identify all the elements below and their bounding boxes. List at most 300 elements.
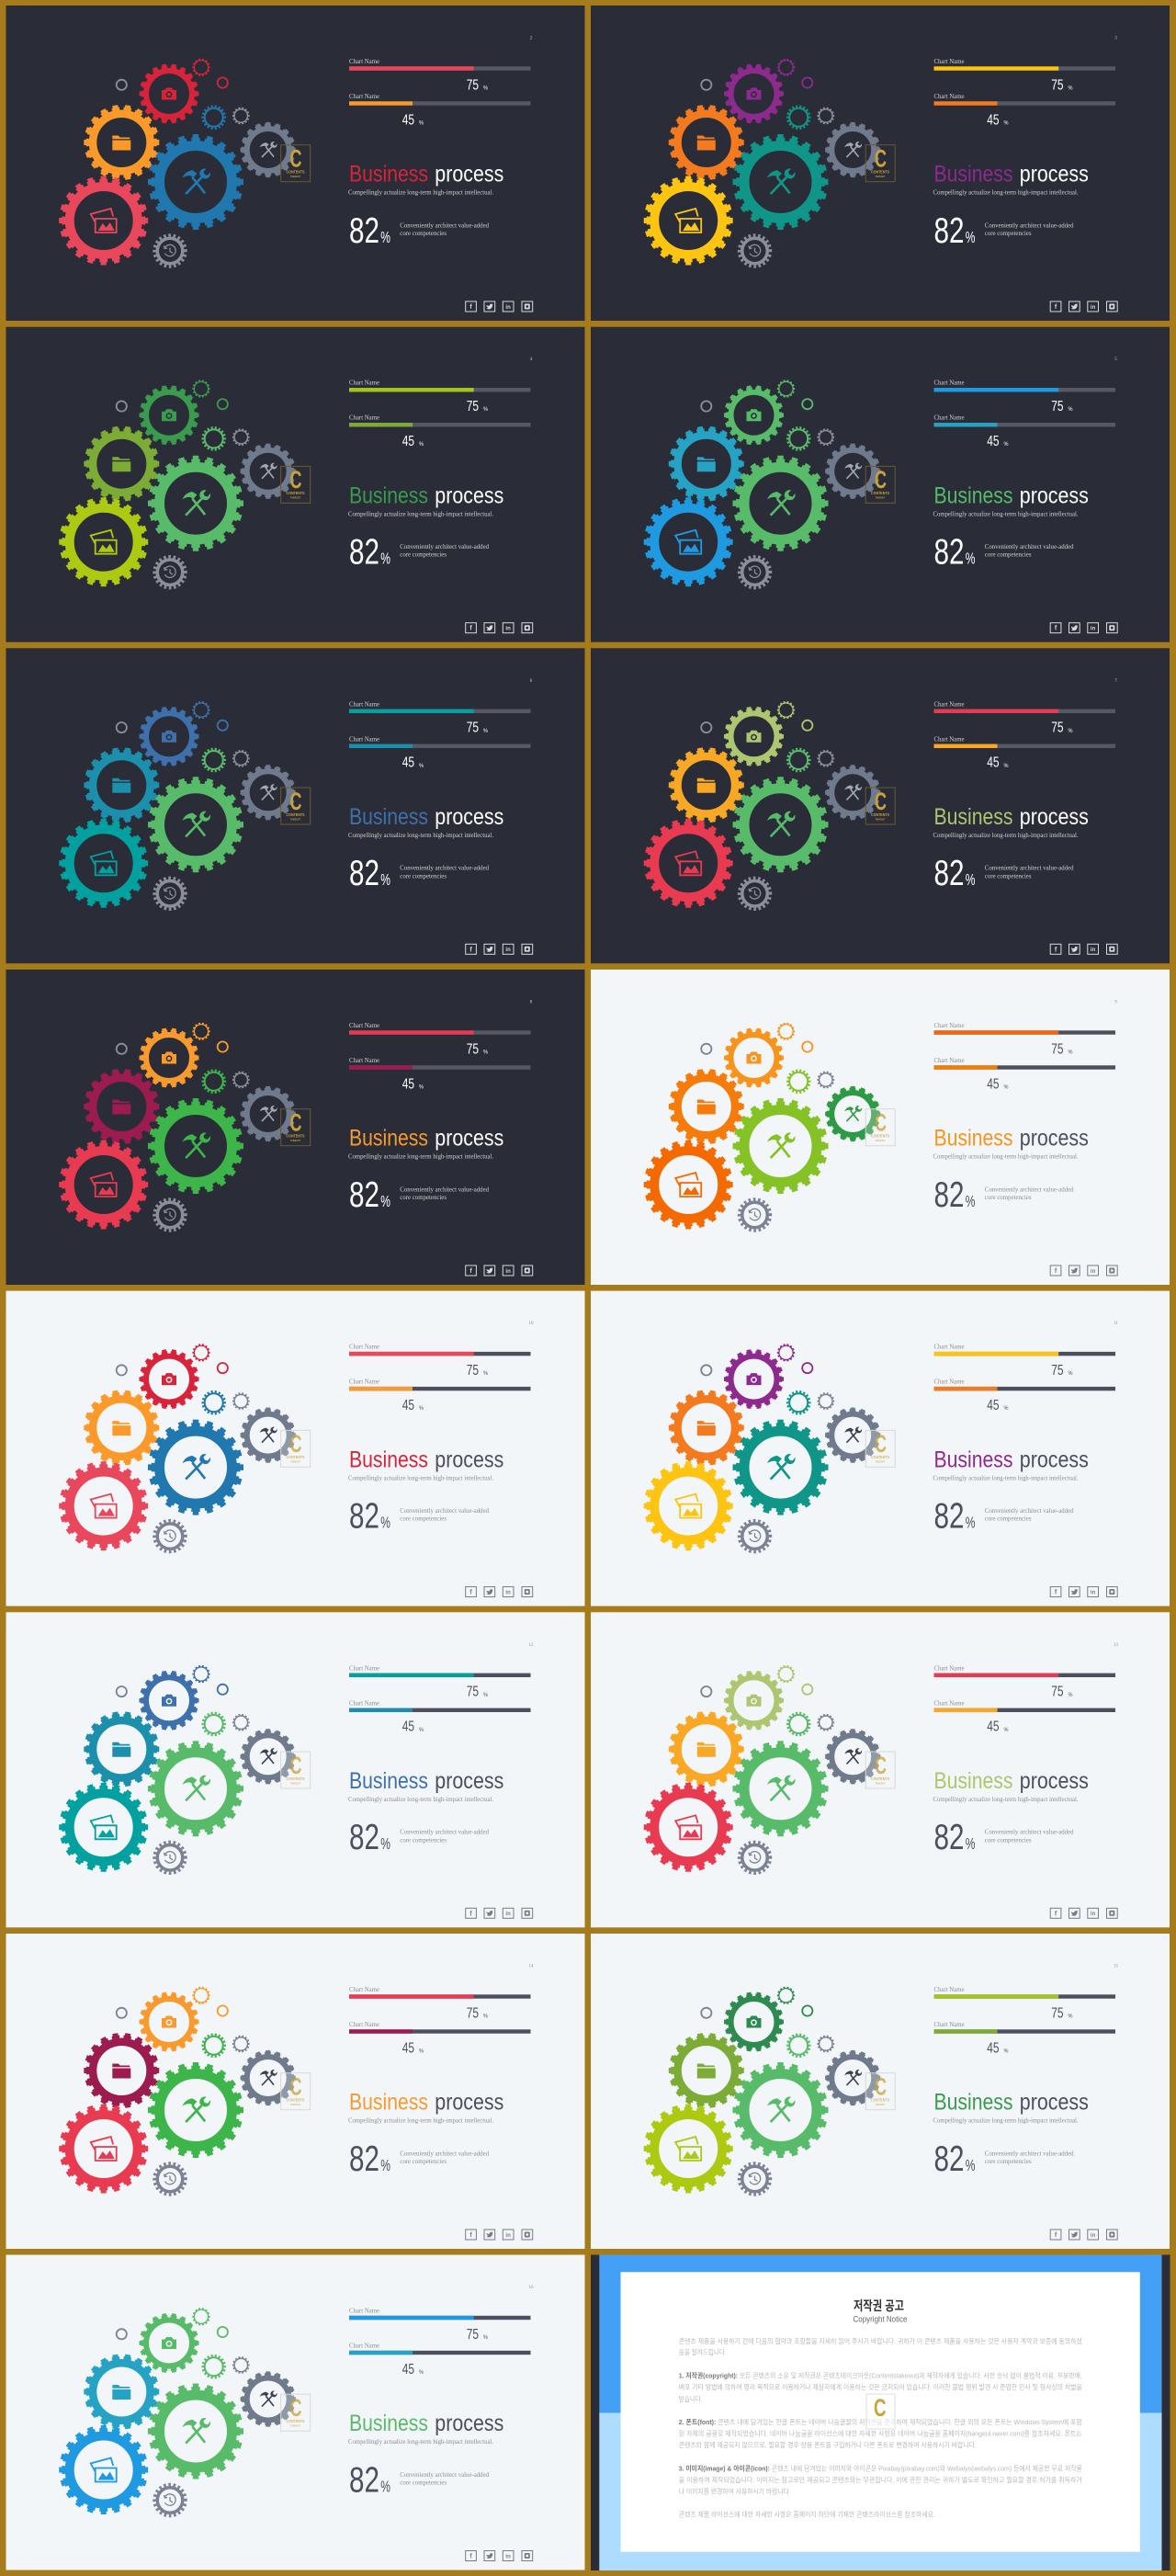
bar chart: 45%: 45 — [987, 112, 1000, 128]
gear cluster — [646, 1666, 879, 1873]
small decorative gears — [117, 702, 249, 771]
small decorative gears — [117, 59, 249, 129]
bar chart: 45%: % — [1003, 764, 1009, 769]
heading — [933, 482, 1089, 508]
bar chart: 75%: Chart Name — [349, 1021, 380, 1029]
watermark: TAKEOUT — [290, 1140, 300, 1142]
bar chart: 75%: % — [483, 86, 489, 92]
social icons: in — [505, 2233, 511, 2239]
bar chart: 75%: % — [1068, 407, 1073, 413]
bar chart: 45%: 45 — [987, 1076, 1000, 1092]
gear cluster — [61, 1345, 294, 1552]
bar chart: 45% — [933, 92, 1115, 128]
bar chart: 75% — [349, 1663, 531, 1700]
watermark — [281, 2394, 311, 2431]
bar chart: 45% — [349, 1698, 531, 1735]
watermark: CONTENTS — [871, 1455, 889, 1459]
heading: Business — [349, 1126, 428, 1152]
bar chart: 45% — [349, 414, 531, 449]
stat description: Conveniently architect value-added — [985, 1506, 1074, 1515]
gear: photo — [61, 178, 146, 263]
heading: process — [1020, 162, 1089, 187]
stat description: core competencies — [400, 1515, 447, 1523]
notice body: 1. 저작권(copyright): 모든 콘텐츠의 소유 및 저작권은 콘텐츠테이크아웃(Contentstakeout)과 제작자에게 있습니다. 사전 승낙 없이 불법적 이용, 부분판매, — [679, 2371, 1082, 2380]
heading — [933, 1768, 1089, 1794]
page number: 3 — [1114, 37, 1117, 40]
stat: 82%: 82 — [349, 533, 379, 572]
stat description: Conveniently architect value-added — [400, 864, 489, 872]
gear: tools — [150, 2386, 242, 2478]
gear: history — [154, 557, 186, 588]
gear cluster — [646, 380, 879, 588]
heading: Business — [349, 1447, 428, 1472]
stat description — [400, 2470, 489, 2487]
stat: 82%: % — [966, 870, 976, 889]
social icons: f — [1055, 304, 1057, 311]
bar chart: 75%: 75 — [1051, 1685, 1064, 1700]
stat description — [985, 221, 1074, 237]
watermark: C — [875, 788, 887, 815]
bar chart: 45% — [933, 2020, 1115, 2056]
bar chart: 75%: % — [1068, 2014, 1073, 2020]
stat description: core competencies — [400, 2157, 447, 2165]
bar chart: 75%: Chart Name — [933, 379, 965, 387]
gear: tools — [735, 1100, 827, 1192]
gear: history — [154, 235, 186, 267]
notice body: 을 이용하여 제작되었습니다. 이미지는 참고로만 제공되고 콘텐츠와는 무관합니다. 이에 관한 권리는 귀하가 별도로 확인하고 필요할 경우 허가를 취득하거 — [679, 2476, 1082, 2484]
bar chart: 45%: 45 — [987, 755, 1000, 771]
stat description — [985, 1185, 1074, 1201]
social icons: f — [469, 1911, 472, 1917]
stat description — [985, 1828, 1074, 1844]
bar chart: 45%: 45 — [987, 1398, 1000, 1413]
heading — [933, 162, 1089, 187]
bar chart: 45% — [933, 1378, 1115, 1413]
gear: photo — [61, 499, 146, 584]
bar chart: 75%: % — [483, 729, 489, 734]
small decorative gears — [117, 1345, 249, 1413]
social icons — [1050, 1265, 1117, 1276]
panel: slide 6 — [6, 648, 584, 963]
heading: process — [1020, 1768, 1089, 1794]
heading: Business — [933, 1447, 1012, 1472]
small decorative gears — [117, 1024, 249, 1093]
bar chart: 75%: 75 — [1051, 1041, 1064, 1057]
social icons: in — [505, 1590, 511, 1595]
bar chart: 75% — [933, 699, 1115, 736]
watermark: C — [290, 2073, 301, 2101]
bar chart: 45% — [933, 414, 1115, 449]
bar chart: 75%: 75 — [467, 721, 479, 736]
subtitle: Compellingly actualize long-term high-impact intellectual. — [348, 188, 493, 197]
heading — [933, 1126, 1089, 1152]
watermark: C — [290, 788, 301, 815]
watermark: C — [290, 1108, 301, 1136]
watermark: CONTENTS — [871, 169, 889, 175]
gear cluster — [646, 59, 879, 267]
bar chart: 75%: % — [1068, 1371, 1073, 1377]
panel: slide 10 — [6, 1291, 584, 1606]
small decorative gears — [701, 380, 833, 449]
heading: Business — [933, 2090, 1012, 2116]
gear: history — [154, 878, 186, 909]
watermark: C — [875, 466, 887, 494]
bar chart: 75%: % — [483, 1371, 489, 1377]
social icons: f — [469, 626, 472, 632]
gear: history — [739, 2163, 770, 2195]
gear: photo — [646, 1141, 731, 1228]
watermark: C — [875, 1108, 887, 1136]
gear cluster — [61, 1666, 294, 1873]
gear: gray tools — [242, 123, 294, 176]
stat description — [400, 1506, 489, 1523]
stat description: core competencies — [400, 229, 447, 237]
bar chart: 75% — [933, 57, 1115, 93]
gear: folder — [671, 428, 742, 500]
social icons: f — [469, 2553, 472, 2560]
heading: process — [1020, 1447, 1089, 1472]
page number: 14 — [529, 1965, 534, 1969]
watermark — [865, 788, 895, 824]
subtitle: Compellingly actualize long-term high-impact intellectual. — [933, 188, 1079, 197]
bar chart: 75%: Chart Name — [933, 1985, 965, 1993]
page number: 4 — [530, 357, 533, 362]
page number: 12 — [529, 1643, 534, 1648]
social icons: in — [1091, 627, 1096, 632]
page number: 13 — [1114, 1643, 1119, 1648]
social icons — [1050, 623, 1117, 633]
stat description — [985, 864, 1074, 879]
watermark: CONTENTS — [871, 1776, 889, 1781]
bar chart: 45%: % — [1003, 2049, 1009, 2055]
gear cluster — [61, 59, 294, 267]
page number: 16 — [529, 2286, 534, 2290]
social icons — [466, 1265, 533, 1276]
stat: 82%: 82 — [349, 2460, 379, 2500]
watermark: TAKEOUT — [875, 1140, 886, 1142]
page number: 5 — [1114, 357, 1117, 362]
watermark: CONTENTS — [287, 812, 305, 817]
gear: gray tools — [242, 1087, 294, 1140]
gear: folder — [671, 107, 742, 178]
bar chart: 75%: 75 — [467, 1363, 479, 1379]
gear: history — [154, 1842, 186, 1873]
bar chart: 75%: % — [1068, 86, 1073, 92]
gear: camera — [141, 1672, 198, 1729]
gear: folder — [671, 749, 742, 822]
social icons: f — [469, 304, 472, 311]
bar chart: 45% — [349, 734, 531, 771]
subtitle: Compellingly actualize long-term high-impact intellectual. — [348, 1152, 493, 1161]
page number: 9 — [1114, 1000, 1117, 1005]
bar chart: 45%: Chart Name — [349, 734, 380, 743]
gear: photo — [646, 2106, 731, 2191]
panel: slide 5 — [591, 327, 1170, 642]
watermark: C — [290, 466, 301, 494]
bar chart: 75%: 75 — [1051, 721, 1064, 736]
gear: photo — [646, 821, 731, 906]
bar chart: 45%: % — [1003, 442, 1009, 448]
watermark: C — [290, 2394, 301, 2422]
stat description: core competencies — [985, 1515, 1032, 1523]
notice subtitle: Copyright Notice — [853, 2314, 908, 2323]
gear: gray tools — [242, 1731, 294, 1783]
stat: 82%: % — [380, 2156, 390, 2174]
social icons — [466, 1908, 533, 1918]
gear cluster — [646, 702, 879, 909]
social icons — [466, 944, 533, 954]
gear: folder — [85, 1071, 158, 1142]
stat description: core competencies — [985, 550, 1032, 559]
stat: 82%: % — [966, 550, 976, 568]
stat description: core competencies — [400, 2478, 447, 2487]
social icons: in — [505, 948, 511, 953]
stat: 82%: 82 — [349, 1818, 379, 1857]
bar chart: 45%: % — [1003, 1728, 1009, 1733]
gear: camera — [141, 1029, 198, 1086]
stat: 82%: % — [966, 1834, 976, 1853]
gear: tools — [150, 136, 242, 228]
heading: Business — [349, 482, 428, 508]
stat: 82%: % — [966, 228, 976, 246]
subtitle: Compellingly actualize long-term high-impact intellectual. — [933, 2116, 1079, 2125]
small decorative gears — [117, 1666, 249, 1735]
social icons — [466, 623, 533, 633]
stat description: core competencies — [400, 550, 447, 559]
social icons: f — [1055, 1268, 1057, 1275]
stat description: Conveniently architect value-added — [985, 221, 1074, 229]
watermark: CONTENTS — [871, 1134, 889, 1138]
heading: Business — [933, 162, 1012, 187]
heading: Business — [349, 1768, 428, 1794]
social icons: f — [1055, 626, 1057, 632]
social icons: in — [1091, 1269, 1096, 1275]
bar chart: 75% — [933, 379, 1115, 414]
panel: copyright notice — [591, 2255, 1170, 2570]
bar chart: 45%: % — [419, 764, 424, 769]
stat: 82%: 82 — [933, 533, 965, 572]
bar chart: 45%: Chart Name — [349, 2020, 380, 2028]
heading: Business — [933, 804, 1012, 830]
heading: process — [435, 2090, 503, 2116]
panel: slide 2 — [6, 6, 584, 321]
stat: 82%: % — [966, 1192, 976, 1210]
heading — [933, 1447, 1089, 1472]
bar chart: 75% — [933, 1985, 1115, 2021]
gear: tools — [150, 2064, 242, 2156]
small decorative gears — [701, 59, 833, 129]
panel: slide 14 — [6, 1934, 584, 2249]
social icons: f — [1055, 1911, 1057, 1917]
gear: camera — [141, 387, 198, 444]
bar chart: 75%: 75 — [467, 1685, 479, 1700]
subtitle: Compellingly actualize long-term high-impact intellectual. — [348, 1795, 493, 1803]
gear: history — [154, 1199, 186, 1231]
page number: 6 — [530, 679, 533, 684]
small decorative gears — [701, 1345, 833, 1413]
stat description: core competencies — [400, 1193, 447, 1201]
gear: gray tools — [242, 766, 294, 819]
watermark: TAKEOUT — [875, 2104, 886, 2106]
stat description — [985, 542, 1074, 559]
bar chart: 45%: 45 — [402, 2040, 414, 2056]
gear: camera — [726, 1351, 783, 1408]
heading — [933, 2090, 1089, 2116]
stat description — [985, 2149, 1074, 2165]
bar chart: 75%: Chart Name — [933, 1663, 965, 1672]
gear: camera — [726, 65, 783, 122]
watermark: CONTENTS — [287, 1776, 305, 1781]
stat: 82%: % — [380, 1192, 390, 1210]
gear: history — [154, 2163, 186, 2195]
stat description: core competencies — [985, 2157, 1032, 2165]
watermark: TAKEOUT — [875, 176, 886, 178]
gear cluster — [61, 380, 294, 588]
gear: tools — [735, 2064, 827, 2156]
stat description: Conveniently architect value-added — [985, 542, 1074, 550]
watermark: TAKEOUT — [290, 497, 300, 500]
heading: Business — [349, 162, 428, 187]
gear: camera — [141, 1993, 198, 2050]
gear: tools — [150, 1100, 242, 1192]
watermark — [865, 1430, 895, 1467]
panel: slide 13 — [591, 1612, 1170, 1927]
bar chart: 45%: % — [1003, 121, 1009, 127]
heading: process — [435, 162, 503, 187]
watermark — [865, 466, 895, 503]
bar chart: 45%: % — [1003, 1084, 1009, 1090]
bar chart: 75%: 75 — [1051, 1363, 1064, 1379]
heading — [933, 804, 1089, 830]
bar chart: 45%: 45 — [402, 434, 414, 449]
stat: 82%: 82 — [933, 1818, 965, 1857]
gear: camera — [726, 387, 783, 444]
gear: tools — [735, 1422, 827, 1514]
bar chart: 45%: 45 — [402, 112, 414, 128]
gear: camera — [726, 1029, 783, 1086]
stat: 82%: 82 — [349, 211, 379, 251]
watermark: C — [290, 145, 301, 173]
watermark: CONTENTS — [871, 491, 889, 495]
heading: process — [435, 1768, 503, 1794]
heading: process — [435, 2411, 503, 2436]
bar chart: 75% — [349, 1985, 531, 2021]
bar chart: 75% — [349, 1343, 531, 1379]
small decorative gears — [117, 380, 249, 449]
social icons: in — [1091, 1590, 1096, 1595]
stat: 82%: 82 — [349, 1496, 379, 1536]
watermark: C — [290, 1752, 301, 1779]
bar chart: 45%: 45 — [987, 1719, 1000, 1735]
bar chart: 75%: 75 — [467, 399, 479, 414]
gear: tools — [735, 136, 827, 228]
bar chart: 45%: 45 — [987, 2040, 1000, 2056]
panel: slide 4 — [6, 327, 584, 642]
watermark — [281, 466, 311, 503]
page number: 10 — [529, 1322, 534, 1326]
watermark: TAKEOUT — [875, 1461, 886, 1464]
gear: folder — [85, 2355, 158, 2428]
social icons: in — [505, 305, 511, 311]
stat description — [400, 864, 489, 879]
panel: slide 7 — [591, 648, 1170, 963]
bar chart: 75%: Chart Name — [349, 379, 380, 387]
subtitle: Compellingly actualize long-term high-impact intellectual. — [348, 831, 493, 839]
gear: gray tools — [827, 1731, 879, 1783]
stat: 82%: 82 — [933, 1496, 965, 1536]
bar chart: 75%: Chart Name — [933, 699, 965, 708]
bar chart: 75% — [349, 57, 531, 93]
stat description: Conveniently architect value-added — [400, 1828, 489, 1836]
watermark: TAKEOUT — [875, 497, 886, 500]
stat description: core competencies — [985, 1193, 1032, 1201]
subtitle: Compellingly actualize long-term high-impact intellectual. — [348, 1473, 493, 1481]
stat description: Conveniently architect value-added — [985, 1828, 1074, 1836]
bar chart: 45%: Chart Name — [933, 414, 965, 422]
bar chart: 45%: % — [419, 1406, 424, 1412]
social icons: f — [469, 947, 472, 953]
bar chart: 45% — [349, 92, 531, 128]
stat description: core competencies — [400, 871, 447, 879]
stat: 82%: % — [380, 1834, 390, 1853]
stat description — [400, 542, 489, 559]
bar chart: 45%: 45 — [402, 2362, 414, 2377]
panel: slide 15 — [591, 1934, 1170, 2249]
stat: 82%: 82 — [933, 211, 965, 251]
stat description: core competencies — [985, 1835, 1032, 1844]
bar chart: 75%: Chart Name — [933, 57, 965, 65]
stat description: Conveniently architect value-added — [400, 2149, 489, 2157]
heading: Business — [349, 2411, 428, 2436]
social icons — [466, 301, 533, 312]
notice title: 저작권 공고 — [854, 2298, 904, 2313]
watermark — [281, 1430, 311, 1467]
watermark: C — [875, 1430, 887, 1458]
gear: history — [154, 2485, 186, 2516]
notice body: 콘텐츠 제품을 사용하기 전에 다음의 협약과 조항들을 자세히 읽어 주시기 바랍니다. 귀하가 이 콘텐츠 제품을 사용하는 것은 사용자 계약과 보증에 동의하셨 — [679, 2337, 1082, 2345]
heading: process — [1020, 482, 1089, 508]
bar chart: 45%: 45 — [402, 755, 414, 771]
subtitle: Compellingly actualize long-term high-impact intellectual. — [933, 1152, 1079, 1161]
stat description: Conveniently architect value-added — [400, 542, 489, 550]
heading — [349, 482, 503, 508]
bar chart: 45% — [349, 1056, 531, 1092]
bar chart: 45%: Chart Name — [933, 734, 965, 743]
gear: gray tools — [827, 123, 879, 176]
bar chart: 75%: Chart Name — [349, 1663, 380, 1672]
stat: 82%: % — [380, 870, 390, 889]
social icons: in — [505, 1269, 511, 1275]
social icons: in — [505, 1912, 511, 1917]
stat description: Conveniently architect value-added — [400, 221, 489, 229]
heading — [349, 2090, 503, 2116]
gear: photo — [61, 1141, 146, 1228]
page number: 7 — [1114, 679, 1117, 684]
bar chart: 45%: % — [419, 2049, 424, 2055]
subtitle: Compellingly actualize long-term high-impact intellectual. — [933, 831, 1079, 839]
social icons: in — [1091, 948, 1096, 953]
bar chart: 45%: Chart Name — [933, 2020, 965, 2028]
watermark — [865, 1752, 895, 1788]
watermark: CONTENTS — [287, 1455, 305, 1459]
social icons: f — [469, 1590, 472, 1596]
gear: tools — [150, 1422, 242, 1514]
social icons — [1050, 1908, 1117, 1918]
gear: tools — [735, 458, 827, 550]
subtitle: Compellingly actualize long-term high-impact intellectual. — [933, 1795, 1079, 1803]
gear: history — [154, 1521, 186, 1552]
gear: folder — [671, 1391, 742, 1464]
